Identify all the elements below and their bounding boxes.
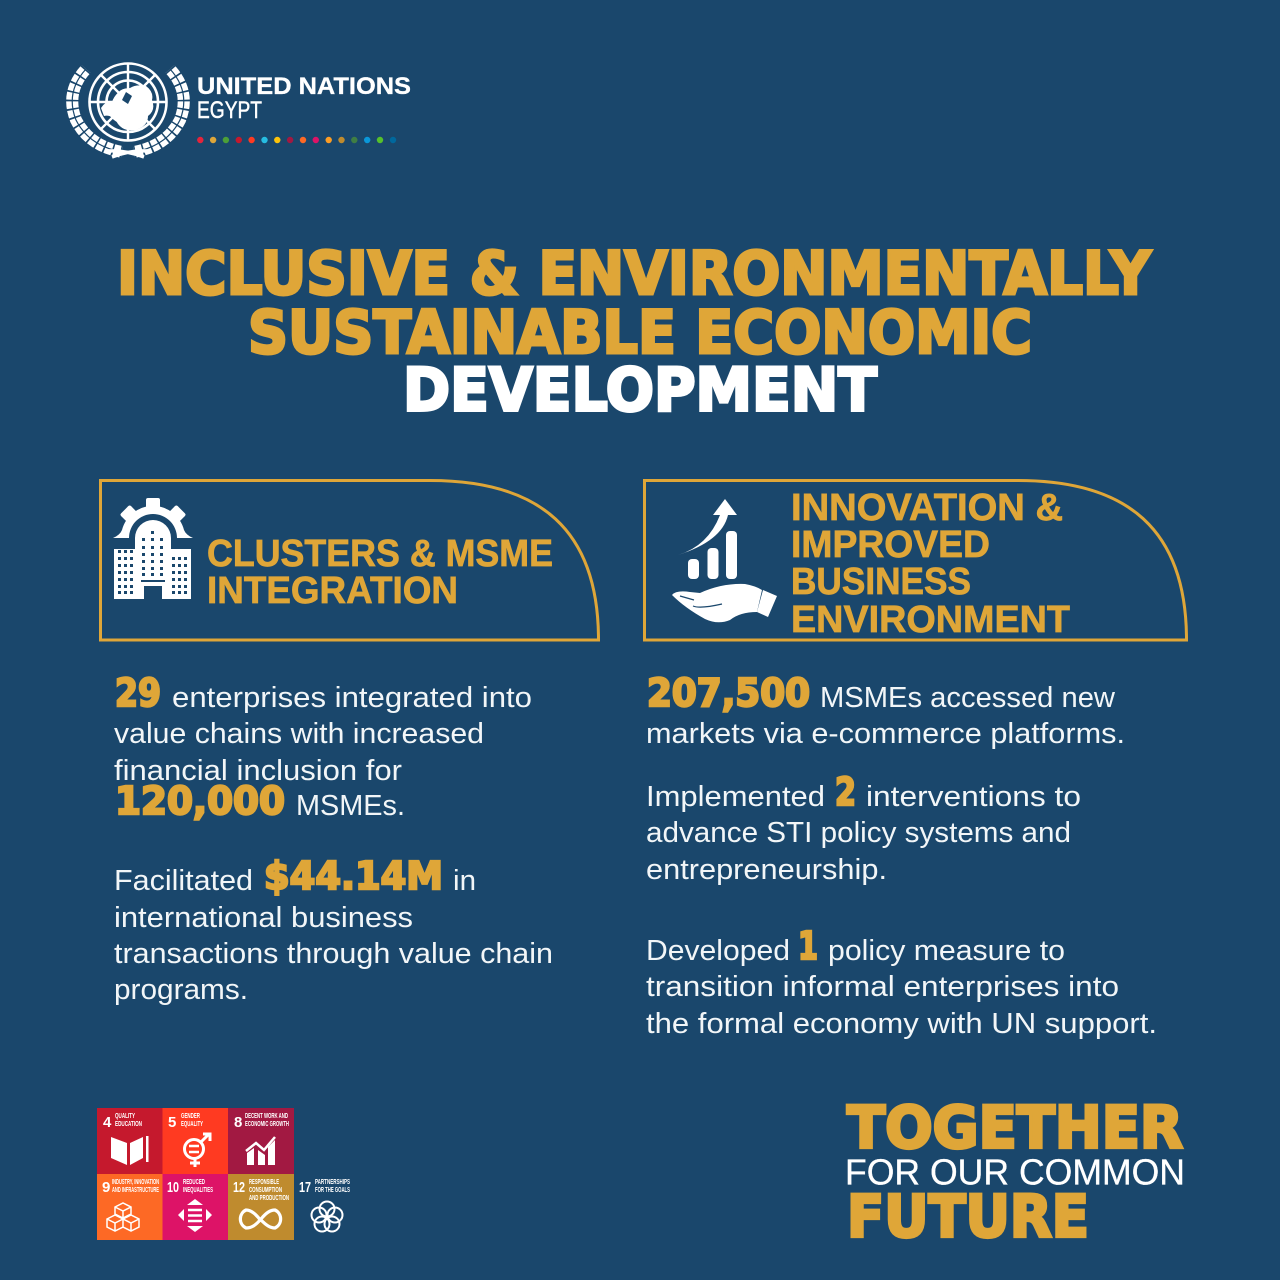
SDG 5 tile: GENDER [181,1113,200,1120]
text block: STI interventions: interventions to [866,781,1081,813]
SDG 12 tile: RESPONSIBLE [249,1179,279,1186]
SDG 17 partnerships: FOR THE GOALS [315,1187,350,1194]
SDG 12 tile [228,1174,294,1240]
slogan: TOGETHER [847,1094,1183,1162]
icon: hand with growth chart [672,499,777,622]
SDG 5 tile [162,1108,228,1174]
text block: business transactions: Facilitated [114,865,253,897]
text block: enterprises: financial inclusion for [114,755,402,787]
text block: enterprises: MSMEs. [296,790,405,822]
panel: innovation and business environment [644,480,1186,1040]
slogan: FUTURE [847,1182,1089,1250]
SDG 17 partnerships [299,1179,350,1232]
header: UN Egypt logo [72,63,411,157]
SDG 8 tile: ECONOMIC GROWTH [245,1121,289,1128]
SDG 12 tile: CONSUMPTION [249,1187,282,1194]
panel header frame [100,480,598,640]
text block: business transactions [114,854,553,1006]
text block: policy measure: 1 [798,924,818,968]
text block: enterprises: 120,000 [115,779,285,823]
title [117,239,1152,426]
panel header frame [644,480,1186,640]
SDG 9 tile: AND INFRASTRUCTURE [112,1187,159,1194]
title: SUSTAINABLE ECONOMIC [248,298,1032,368]
SDG 10 tile: REDUCED [183,1179,205,1186]
SDG colour dots [197,137,396,143]
text block: business transactions: programs. [114,974,248,1006]
SDG 10 tile [162,1174,228,1240]
SDG 9 tile: 9 [102,1179,110,1196]
text block: policy measure: the formal economy with UN support. [646,1008,1157,1040]
SDG 8 tile: DECENT WORK AND [245,1113,288,1120]
SDG 9 tile: INDUSTRY, INNOVATION [112,1179,159,1186]
SDG 10 tile: INEQUALITIES [183,1187,213,1194]
SDG 5 tile: 5 [168,1114,176,1131]
text block: policy measure: transition informal enterprises into [646,971,1119,1003]
text block: e-commerce: markets via e-commerce platforms. [646,718,1125,750]
SDG 9 tile [97,1174,162,1240]
SDG icon grid [97,1108,350,1240]
panel heading: INNOVATION & [791,487,1063,529]
panel heading [207,533,553,612]
text block: STI interventions: 2 [835,770,856,814]
icon: factory building with gear [113,498,193,599]
panel heading: CLUSTERS & MSME [207,533,553,575]
text block: policy measure [646,924,1157,1040]
slogan [845,1094,1185,1250]
panel heading: ENVIRONMENT [791,599,1070,641]
panel heading: IMPROVED [791,524,990,566]
SDG 4 tile: QUALITY [115,1113,135,1120]
SDG 12 tile: 12 [233,1179,245,1196]
text block: STI interventions [646,770,1081,886]
panel heading: INTEGRATION [207,570,458,612]
organisation name: UNITED NATIONS [197,73,411,100]
text block: e-commerce: MSMEs accessed new [820,682,1116,714]
text block: business transactions: international business [114,902,413,934]
SDG 17 partnerships: 17 [299,1179,311,1196]
text block: policy measure: policy measure to [828,935,1065,967]
title: INCLUSIVE & ENVIRONMENTALLY [117,239,1152,309]
text block: STI interventions: advance STI policy systems and [646,817,1071,849]
panel: clusters and MSME integration [100,480,598,1006]
text block: policy measure: Developed [646,935,790,967]
text block: enterprises [114,671,532,823]
panel heading: BUSINESS [791,561,971,603]
SDG 4 tile [97,1108,162,1174]
text block: enterprises: enterprises integrated into [172,682,532,714]
text block: business transactions: in [453,865,476,897]
SDG 4 tile: EDUCATION [115,1121,142,1128]
SDG 4 tile: 4 [103,1114,112,1131]
text block: STI interventions: Implemented [646,781,825,813]
text block: e-commerce [646,671,1125,750]
text block: enterprises: value chains with increased [114,718,484,750]
country name: EGYPT [197,97,262,124]
icon: UN emblem [72,63,184,157]
slogan: FOR OUR COMMON [845,1152,1185,1192]
SDG 8 tile: 8 [234,1114,242,1131]
panel heading [791,487,1070,641]
SDG 17 partnerships: PARTNERSHIPS [315,1179,350,1186]
text block: STI interventions: entrepreneurship. [646,854,887,886]
SDG 10 tile: 10 [167,1179,179,1196]
text block: enterprises: 29 [115,671,161,715]
text block: business transactions: transactions through value chain [114,938,553,970]
SDG 8 tile [228,1108,294,1174]
text block: e-commerce: 207,500 [647,671,810,715]
title: DEVELOPMENT [403,356,877,426]
SDG 5 tile: EQUALITY [181,1121,203,1128]
SDG 12 tile: AND PRODUCTION [249,1195,289,1202]
text block: business transactions: $44.14M [264,854,443,898]
